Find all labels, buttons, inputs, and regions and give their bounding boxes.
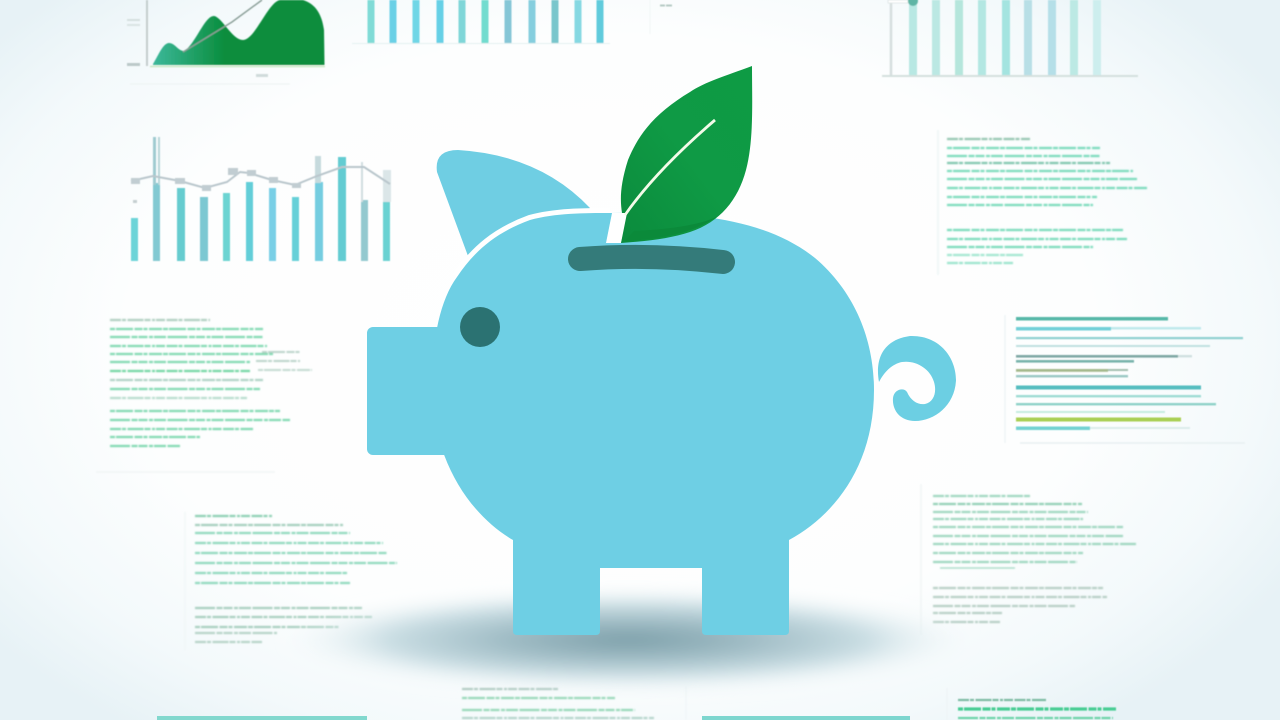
text block: left bottom	[185, 512, 397, 650]
text block: right top	[938, 130, 1147, 275]
stem highlight	[606, 213, 628, 243]
leaf vein	[625, 120, 715, 215]
chart: top-left area chart	[127, 0, 325, 84]
chart: top-right bar chart	[882, 0, 1138, 76]
text block: right bottom	[921, 484, 1137, 635]
icon: pig body and legs	[432, 213, 874, 635]
ground shadow	[283, 590, 973, 690]
icon: coin slot	[580, 257, 723, 262]
icon: pig eye	[460, 307, 500, 347]
bar: bottom centre strip	[702, 716, 910, 720]
bar list: right middle	[1005, 315, 1245, 443]
icon: pig ear	[437, 150, 590, 256]
text block: bottom right	[947, 688, 1116, 720]
bar: bottom left strip	[157, 716, 367, 720]
chart: left bars with trend line	[131, 137, 391, 261]
text block: left middle	[96, 320, 312, 472]
icon: pig snout	[367, 327, 452, 455]
small text snippet: top centre	[650, 0, 672, 34]
icon: green leaf	[621, 66, 752, 243]
icon: pig tail	[878, 336, 956, 421]
text block: bottom centre	[462, 686, 686, 720]
ear highlight arc	[457, 213, 610, 277]
chart: top-centre bar chart	[352, 0, 610, 44]
piggy bank illustration	[367, 66, 956, 635]
